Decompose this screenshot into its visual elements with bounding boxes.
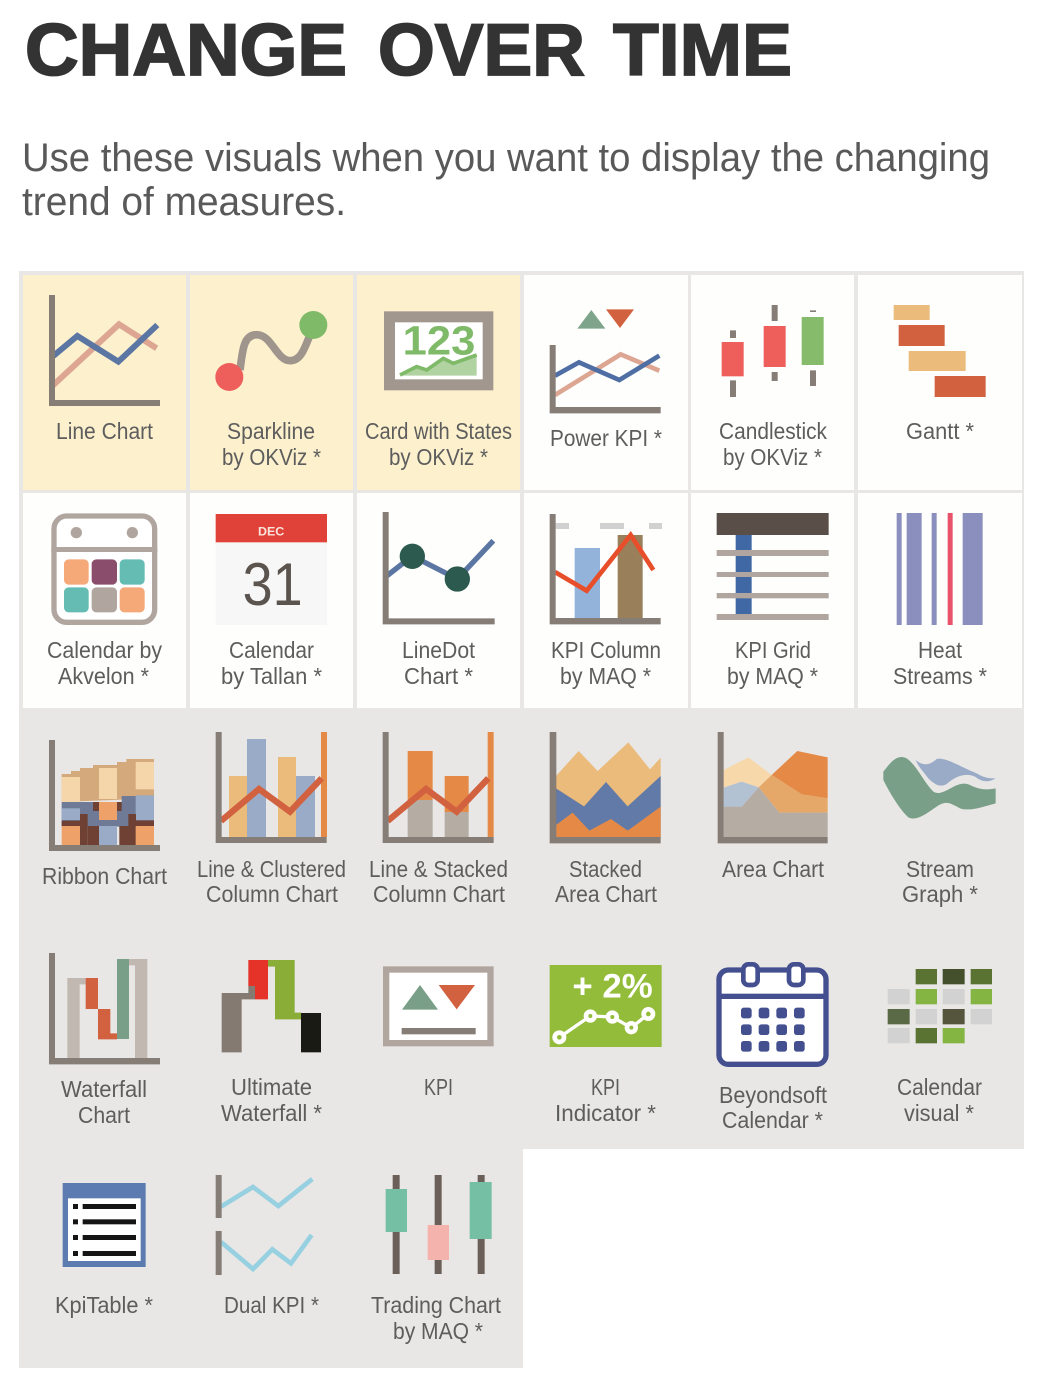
label xyxy=(221,1074,322,1126)
label: Ribbon Chart xyxy=(42,863,168,889)
subtitle text: trend of measures. xyxy=(22,180,346,224)
label: Candlestick xyxy=(719,418,827,444)
title: TIME xyxy=(613,10,792,91)
label: Gantt * xyxy=(906,418,974,444)
label xyxy=(902,856,978,907)
label: Power KPI * xyxy=(550,425,662,451)
panel: KPI xyxy=(383,966,494,1100)
label xyxy=(61,1076,147,1128)
label: KPI xyxy=(424,1074,453,1100)
label: Column Chart xyxy=(206,881,339,907)
label xyxy=(727,637,818,689)
icon: calendar heatmap xyxy=(888,969,992,1043)
icon: area chart xyxy=(718,732,828,843)
panel: Line and Stacked Column Chart xyxy=(369,732,508,907)
icon: stream graph xyxy=(883,757,996,819)
panel: Calendar visual xyxy=(888,969,992,1126)
icon: line chart xyxy=(49,295,160,406)
icon: KPI indicator: + 2% xyxy=(572,968,653,1006)
label: Waterfall * xyxy=(221,1100,322,1126)
icon: KPI table xyxy=(63,1183,146,1267)
panel: Beyondsoft Calendar xyxy=(719,964,828,1133)
panel: Card with States xyxy=(357,275,520,490)
label: Area Chart xyxy=(722,856,825,882)
label: Waterfall xyxy=(61,1076,147,1102)
label: by MAQ * xyxy=(393,1318,483,1344)
panel: LineDot Chart xyxy=(357,493,520,708)
label: Beyondsoft xyxy=(719,1082,828,1108)
panel: Ultimate Waterfall xyxy=(221,960,322,1126)
icon: stacked area xyxy=(550,732,661,843)
label: Heat xyxy=(918,637,963,663)
label xyxy=(47,637,162,689)
label: Line & Clustered xyxy=(197,856,346,882)
label: KpiTable * xyxy=(55,1292,153,1318)
label: by MAQ * xyxy=(727,663,818,689)
label: LineDot xyxy=(402,637,476,663)
subtitle text: Use these visuals when you want to display the changing xyxy=(22,136,990,180)
label xyxy=(719,418,827,470)
label: Chart * xyxy=(404,663,473,689)
icon: line and clustered column xyxy=(216,732,327,843)
subtitle text xyxy=(22,136,990,224)
icon: line dot chart xyxy=(383,512,495,624)
panel: Candlestick xyxy=(691,275,854,490)
panel: Power KPI xyxy=(524,275,688,490)
label: Calendar by xyxy=(47,637,162,663)
label: by OKViz * xyxy=(222,444,321,470)
label: Ultimate xyxy=(231,1074,312,1100)
label: Akvelon * xyxy=(58,663,149,689)
label: Streams * xyxy=(893,663,987,689)
panel: Stacked Area Chart xyxy=(550,732,661,907)
panel: Line Chart xyxy=(23,275,186,490)
panel: KPI Indicator xyxy=(550,965,662,1126)
panel: Sparkline xyxy=(190,275,353,490)
label: by OKViz * xyxy=(389,444,488,470)
label: visual * xyxy=(904,1100,974,1126)
label xyxy=(719,1082,828,1133)
label: Calendar xyxy=(897,1074,982,1100)
label xyxy=(555,1074,656,1126)
title xyxy=(25,10,792,91)
label: Area Chart xyxy=(555,881,658,907)
icon: dual KPI xyxy=(216,1175,312,1275)
label: Indicator * xyxy=(555,1100,656,1126)
label: Calendar * xyxy=(722,1107,823,1133)
label: Graph * xyxy=(902,881,978,907)
label: KPI Grid xyxy=(735,637,811,663)
panel: Trading Chart xyxy=(371,1175,502,1344)
panel: Heat Streams xyxy=(858,493,1022,708)
panel: KpiTable xyxy=(55,1183,153,1318)
label xyxy=(369,856,508,907)
label: by Tallan * xyxy=(221,663,322,689)
icon: line and stacked column xyxy=(383,732,494,843)
panel: Dual KPI xyxy=(216,1175,319,1318)
label xyxy=(197,856,346,907)
panel: KPI Column xyxy=(524,493,688,708)
title: CHANGE xyxy=(25,10,347,91)
icon: gantt xyxy=(894,305,986,397)
label: Stacked xyxy=(569,856,642,882)
label: by MAQ * xyxy=(560,663,651,689)
label: Line Chart xyxy=(56,418,154,444)
icon: heat streams xyxy=(897,513,983,625)
icon: KPI grid xyxy=(717,513,829,620)
icon: trading chart xyxy=(386,1175,492,1274)
icon: date calendar: DEC xyxy=(258,525,284,539)
label: Column Chart xyxy=(373,881,506,907)
label xyxy=(365,418,512,470)
icon: KPI indicator xyxy=(550,965,662,1047)
icon: card with states: 123 xyxy=(403,317,475,363)
title: OVER xyxy=(378,10,585,91)
panel: Calendar by Tallan xyxy=(190,493,353,708)
icon: candlestick xyxy=(722,305,824,397)
panel: Area Chart xyxy=(718,732,828,882)
label: Chart xyxy=(78,1102,131,1128)
label: KPI Column xyxy=(551,637,661,663)
label xyxy=(221,637,322,689)
label: Dual KPI * xyxy=(224,1292,319,1318)
label xyxy=(371,1292,502,1344)
icon: KPI column xyxy=(550,514,662,624)
panel: grid background xyxy=(19,271,1024,1368)
label: Trading Chart xyxy=(371,1292,502,1318)
icon: calendar tiles xyxy=(51,516,157,622)
panel: Ribbon Chart xyxy=(42,740,168,889)
panel: Stream Graph xyxy=(883,757,996,907)
label: Calendar xyxy=(229,637,314,663)
icon: waterfall xyxy=(49,953,160,1064)
icon: card with states xyxy=(384,311,493,390)
label: Card with States xyxy=(365,418,512,444)
icon: date calendar xyxy=(216,514,327,625)
label xyxy=(551,637,661,689)
label xyxy=(897,1074,982,1126)
icon: ultimate waterfall xyxy=(222,960,321,1052)
icon: power KPI xyxy=(550,309,661,413)
icon: KPI xyxy=(383,966,494,1046)
label xyxy=(402,637,476,689)
panel: KPI Grid xyxy=(691,493,854,708)
panel: Waterfall Chart xyxy=(49,953,160,1128)
icon: sparkline xyxy=(215,311,327,391)
label: by OKViz * xyxy=(723,444,822,470)
label: KPI xyxy=(591,1074,620,1100)
icon: ribbon chart xyxy=(49,740,160,851)
label: Line & Stacked xyxy=(369,856,508,882)
label xyxy=(893,637,987,689)
label xyxy=(222,418,321,470)
panel: Line and Clustered Column Chart xyxy=(197,732,346,907)
label: Stream xyxy=(906,856,974,882)
panel: Gantt xyxy=(858,275,1022,490)
icon: beyondsoft calendar xyxy=(719,964,826,1064)
label xyxy=(555,856,658,907)
icon: date calendar: 31 xyxy=(243,551,303,618)
panel: Calendar by Akvelon xyxy=(23,493,186,708)
label: Sparkline xyxy=(227,418,315,444)
